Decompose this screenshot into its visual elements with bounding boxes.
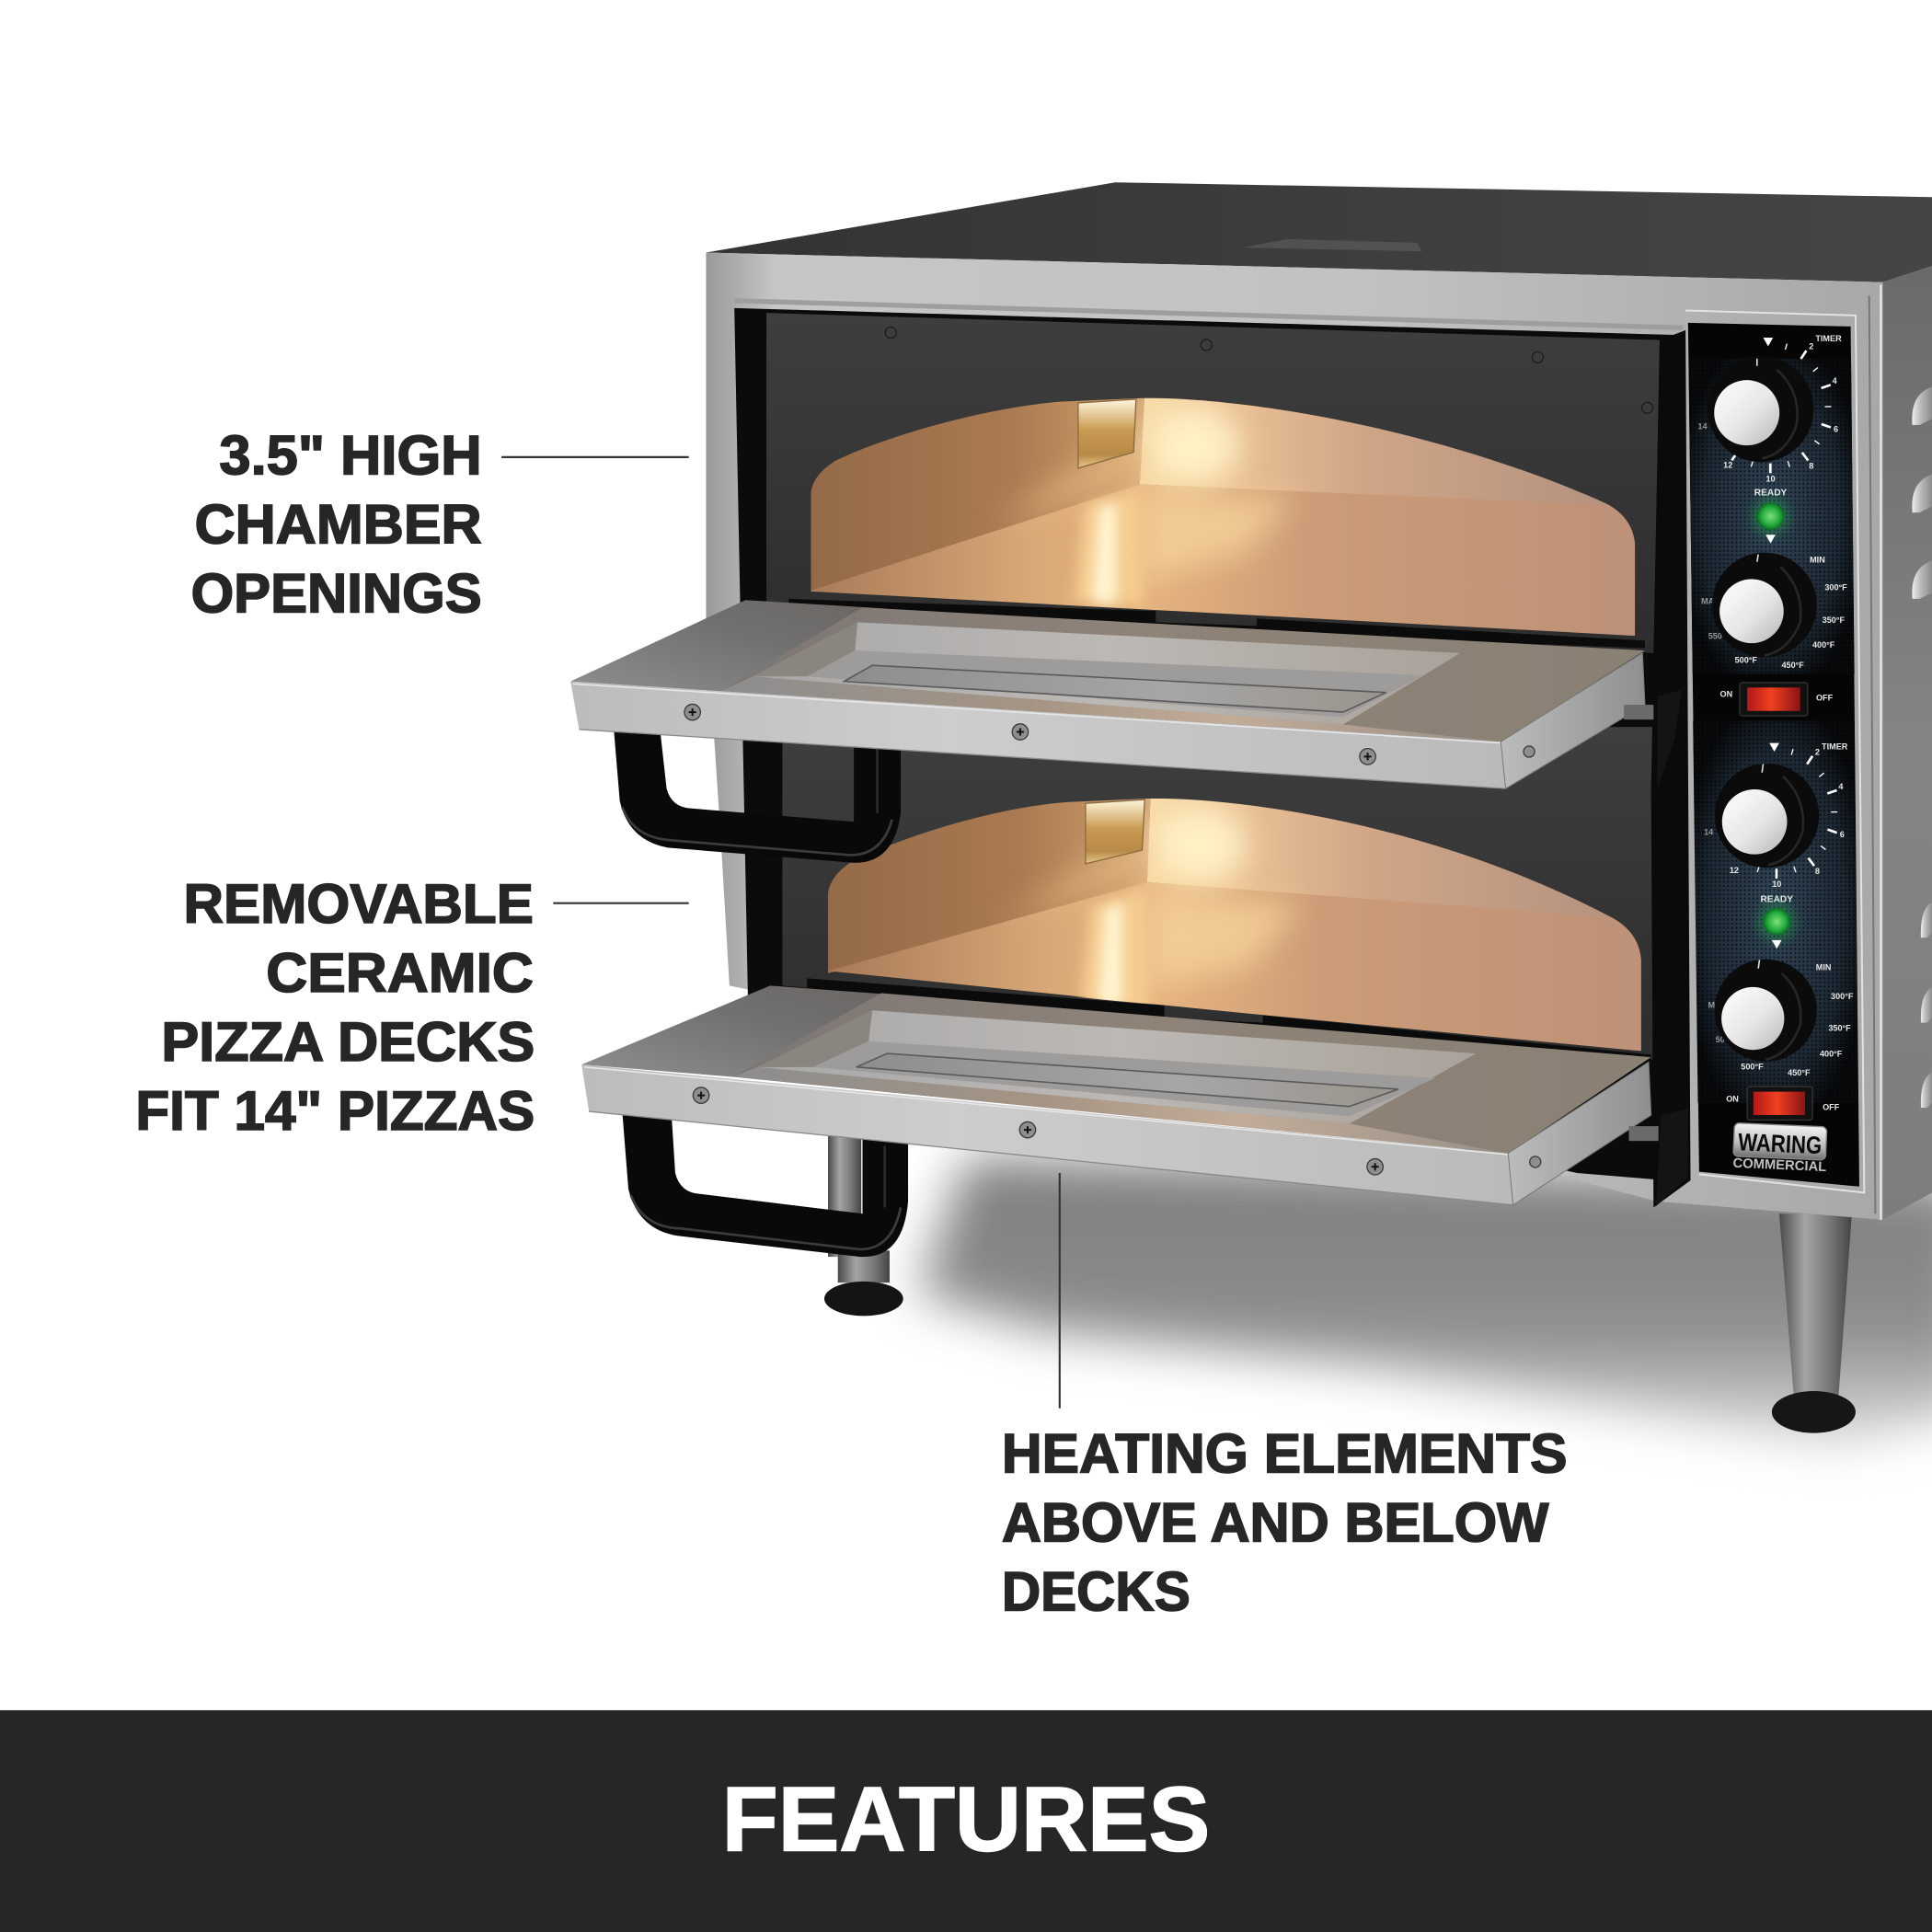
timer dial upper: TIMER xyxy=(1815,334,1842,343)
door top left section xyxy=(581,985,905,1077)
ready light upper: READY xyxy=(1754,488,1788,498)
hinge xyxy=(1629,1109,1688,1206)
power switch upper: OFF xyxy=(1816,693,1834,702)
upper reflection core xyxy=(1092,502,1116,604)
timer dial upper: 2 xyxy=(1809,342,1813,351)
power switch lower: OFF xyxy=(1823,1103,1840,1112)
timer dial upper xyxy=(1697,334,1842,483)
timer dial upper: 6 xyxy=(1834,424,1838,433)
side panel xyxy=(1882,266,1932,1220)
ready light lower xyxy=(1758,894,1795,949)
lower arch interior xyxy=(828,788,1651,1054)
upper floor glow xyxy=(1140,490,1294,579)
timer dial lower: 10 xyxy=(1772,880,1781,889)
tray left wall xyxy=(753,622,857,676)
ready light upper xyxy=(1752,488,1789,544)
temperature knob upper xyxy=(1712,553,1817,658)
timer dial lower: 8 xyxy=(1815,867,1820,876)
tray recess xyxy=(753,622,1460,725)
front lip xyxy=(733,1067,1508,1154)
lower deck lip xyxy=(807,978,1651,1064)
upper corner glow xyxy=(1146,407,1239,486)
lower corner glow xyxy=(1152,806,1246,885)
upper back wall xyxy=(1140,395,1639,508)
ready light lower: READY xyxy=(1760,894,1793,904)
temperature labels lower: MIN xyxy=(1816,963,1831,972)
brand logo xyxy=(1732,1123,1828,1175)
timer knob lower xyxy=(1715,764,1819,868)
upper left wall xyxy=(811,395,1144,592)
oven top xyxy=(706,182,1932,282)
lower cavity xyxy=(782,727,1657,1064)
lower left wall glow xyxy=(1023,845,1152,914)
callout: heating elements xyxy=(1002,1173,1568,1622)
power switch lower xyxy=(1726,1087,1840,1120)
callout: heating elements: HEATING ELEMENTS xyxy=(1002,1421,1568,1484)
temperature knob lower xyxy=(1715,960,1817,1062)
temperature labels lower: M xyxy=(1708,1001,1715,1010)
lower dial face xyxy=(1693,720,1858,1103)
temperature labels lower: 450°F xyxy=(1788,1068,1811,1077)
timer dial upper: 10 xyxy=(1765,474,1776,483)
lower bulb window xyxy=(1086,799,1144,864)
timer dial lower xyxy=(1704,742,1848,889)
tray inner floor xyxy=(813,1041,1435,1116)
front left leg xyxy=(824,1127,903,1316)
panel housing trim xyxy=(1685,284,1880,1220)
door top surface xyxy=(733,993,1651,1154)
callout: chamber openings: CHAMBER xyxy=(195,493,482,556)
power switch upper xyxy=(1720,683,1834,716)
temperature labels upper: 450°F xyxy=(1781,661,1804,670)
hinge xyxy=(1624,690,1682,788)
temperature labels lower xyxy=(1708,963,1854,1077)
upper dial face xyxy=(1688,359,1855,674)
timer dial lower: 6 xyxy=(1840,830,1845,839)
door hinge strip xyxy=(1651,330,1691,1207)
tray left wall xyxy=(758,1010,872,1067)
upper floor xyxy=(809,484,1639,640)
lower floor reflection xyxy=(1081,890,1150,1010)
front lip xyxy=(720,676,1501,742)
timer dial lower: 4 xyxy=(1838,782,1844,791)
temperature labels upper: 300°F xyxy=(1824,583,1847,592)
lower back wall xyxy=(1146,799,1614,918)
door top left section xyxy=(570,600,887,691)
upper door handle xyxy=(614,727,901,863)
lower floor xyxy=(828,882,1651,1054)
callout: ceramic decks: PIZZA DECKS xyxy=(161,1010,535,1073)
upper door xyxy=(570,600,1682,788)
temperature labels lower: 400°F xyxy=(1820,1049,1843,1058)
callout: ceramic decks xyxy=(135,872,689,1142)
lower door xyxy=(581,985,1688,1206)
callout: heating elements: ABOVE AND BELOW xyxy=(1002,1490,1549,1553)
door side bar xyxy=(1501,653,1645,788)
upper deck lip xyxy=(788,599,1645,648)
lower left wall xyxy=(828,788,1151,973)
upper floor reflection xyxy=(1075,490,1144,604)
tray window xyxy=(844,665,1386,712)
floor shadow xyxy=(918,1158,1932,1444)
power switch lower: ON xyxy=(1726,1094,1739,1103)
tray window xyxy=(857,1053,1398,1107)
callout: ceramic decks: CERAMIC xyxy=(266,941,534,1004)
lower door handle xyxy=(622,1111,908,1257)
temperature labels lower: 50 xyxy=(1716,1035,1725,1044)
temperature labels upper: MA xyxy=(1701,596,1715,605)
door front bar xyxy=(581,1064,1513,1205)
callout: chamber openings: 3.5" HIGH xyxy=(219,424,482,487)
door screws xyxy=(693,1087,1541,1175)
temperature labels upper: MIN xyxy=(1810,555,1825,564)
timer dial upper: 12 xyxy=(1723,460,1732,469)
upper cavity xyxy=(766,313,1660,653)
temperature labels upper: 500°F xyxy=(1735,656,1757,665)
banner title: FEATURES xyxy=(722,1769,1210,1871)
temperature labels upper: 400°F xyxy=(1812,640,1835,650)
lower floor glow xyxy=(1147,890,1300,985)
oven illustration xyxy=(570,182,1932,1433)
callout: ceramic decks: REMOVABLE xyxy=(184,872,534,935)
control panel xyxy=(1688,323,1859,1187)
callout: heating elements: DECKS xyxy=(1002,1559,1190,1622)
door front bar xyxy=(570,682,1506,788)
door side bar xyxy=(1508,1062,1651,1205)
embossed top logo xyxy=(1242,239,1422,251)
timer dial lower: 14 xyxy=(1704,827,1714,836)
brand logo: WARING xyxy=(1738,1128,1823,1159)
brand logo: COMMERCIAL xyxy=(1732,1156,1827,1175)
callout: ceramic decks: FIT 14" PIZZAS xyxy=(135,1079,535,1142)
tray recess xyxy=(758,1010,1476,1123)
callout: chamber openings xyxy=(191,424,689,625)
oven cavity backing xyxy=(734,308,1683,1180)
temperature labels upper: 350°F xyxy=(1823,615,1845,625)
timer dial upper: 14 xyxy=(1697,422,1708,431)
timer dial upper: 4 xyxy=(1833,376,1838,385)
temperature labels lower: 500°F xyxy=(1741,1063,1764,1072)
timer dial lower: 12 xyxy=(1730,866,1739,875)
footer banner xyxy=(0,1710,1932,1932)
upper left wall glow xyxy=(1009,442,1148,523)
timer knob upper xyxy=(1708,356,1813,462)
temperature labels upper xyxy=(1701,555,1847,670)
upper arch interior xyxy=(809,395,1639,640)
power switch upper: ON xyxy=(1720,689,1732,698)
tray inner floor xyxy=(807,650,1423,717)
timer dial upper: 8 xyxy=(1809,462,1813,471)
door top surface xyxy=(720,607,1645,742)
front steel frame xyxy=(706,253,1882,1220)
lower reflection core xyxy=(1098,903,1122,1008)
door screws xyxy=(684,704,1535,765)
upper bulb window xyxy=(1078,399,1136,468)
timer dial lower: 2 xyxy=(1815,747,1820,756)
temperature labels lower: 350°F xyxy=(1828,1023,1851,1032)
timer dial lower: TIMER xyxy=(1822,742,1848,751)
frame bevel xyxy=(734,301,1683,328)
callout: chamber openings: OPENINGS xyxy=(191,562,482,625)
temperature labels upper: 550 xyxy=(1708,631,1722,640)
temperature labels lower: 300°F xyxy=(1831,992,1854,1001)
rear right leg xyxy=(1772,1213,1856,1433)
